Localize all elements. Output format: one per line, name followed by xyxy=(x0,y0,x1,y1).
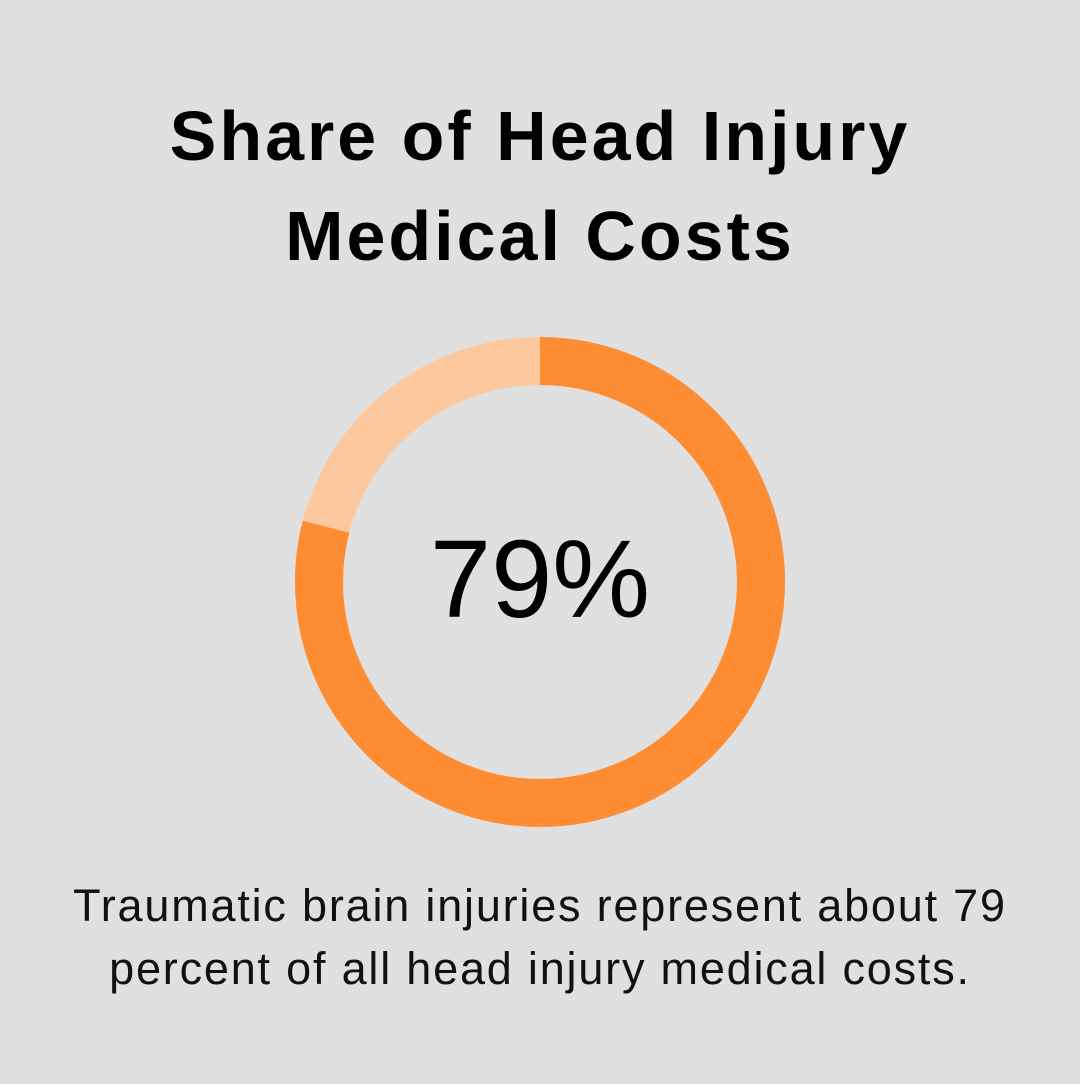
caption: Traumatic brain injuries represent about 79 xyxy=(73,880,1007,931)
center value: 79% xyxy=(430,518,650,641)
title: Medical Costs xyxy=(285,197,795,275)
caption: percent of all head injury medical costs. xyxy=(109,943,971,994)
title: Share of Head Injury xyxy=(170,97,910,175)
title xyxy=(170,97,910,275)
caption xyxy=(73,880,1007,994)
ring background segment xyxy=(319,361,761,803)
ring value segment 79% xyxy=(319,361,761,803)
